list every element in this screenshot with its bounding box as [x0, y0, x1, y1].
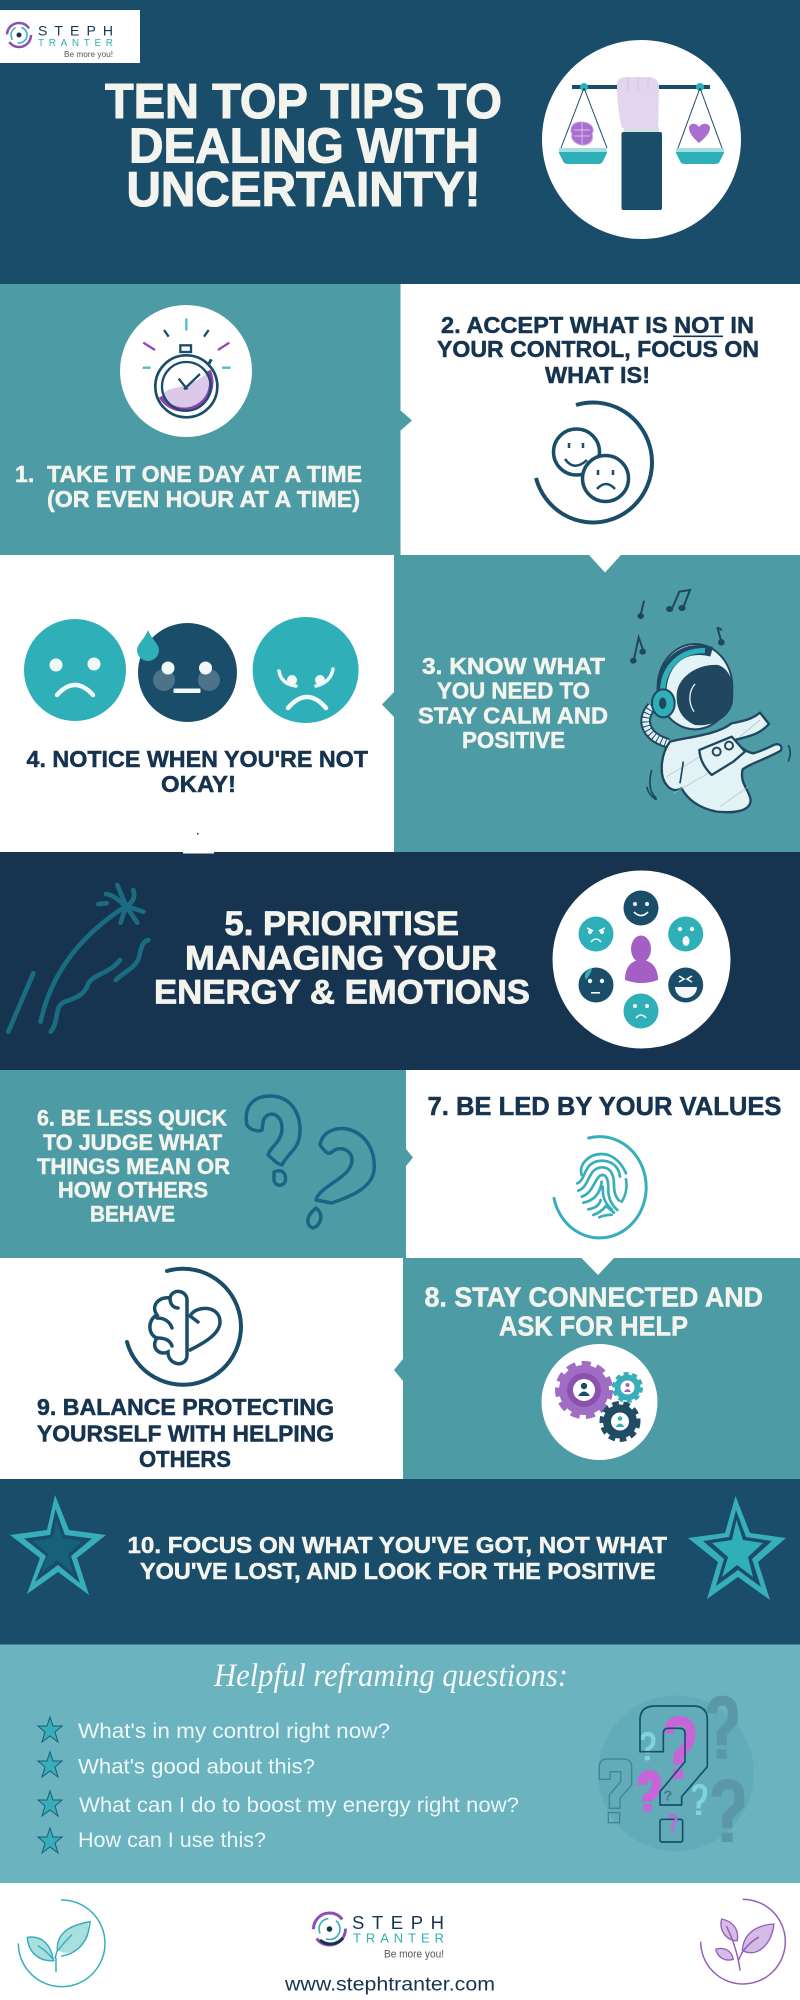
text: tip 10: YOU'VE LOST, AND LOOK FOR THE POSITIVE: [140, 1558, 656, 1584]
icon: question marks: [246, 1096, 374, 1228]
panel: tip 1: [0, 284, 400, 555]
logo: Steph Tranter: [0, 10, 140, 63]
text: tip 10: 10. FOCUS ON WHAT YOU'VE GOT, NOT WHAT: [128, 1532, 668, 1558]
question list: What's good about this?: [78, 1754, 315, 1778]
panel: tip 6: [0, 1070, 406, 1258]
text: tip 3: [418, 653, 608, 753]
text: tip 6: [37, 1106, 230, 1226]
icon: right star: [688, 1496, 786, 1600]
header panel: [0, 0, 800, 284]
text: tip 9: OTHERS: [139, 1446, 231, 1472]
icon: emotions around a person: [552, 870, 730, 1048]
website: www.stephtranter.com: [284, 1974, 495, 1996]
arrow: tip 8 to tip 9: [394, 1359, 403, 1381]
title: DEALING WITH: [129, 120, 479, 174]
text: tip 3: STAY CALM AND: [418, 702, 608, 728]
logo: Steph Tranter: Be more you!: [64, 49, 113, 59]
panel: helpful reframing questions: [0, 1644, 800, 1883]
text: tip 3: YOU NEED TO: [437, 678, 590, 704]
text: tip 9: [37, 1394, 334, 1472]
icon: scales held by hand: [542, 40, 741, 239]
icon: sad face: [24, 619, 126, 721]
text: tip 6: THINGS MEAN OR: [37, 1154, 230, 1179]
icon: nervous face: [137, 623, 237, 722]
text: tip 2: [437, 312, 759, 388]
text: tip 7: 7. BE LED BY YOUR VALUES: [428, 1091, 782, 1121]
panel: tip 5: [0, 851, 800, 1070]
text: tip 1: [15, 461, 362, 512]
icon: list stars: [38, 1717, 62, 1853]
text: tip 9: 9. BALANCE PROTECTING: [37, 1394, 334, 1420]
text: tip 1: 1. TAKE IT ONE DAY AT A TIME: [15, 461, 362, 487]
icon: brain and heart: [127, 1269, 241, 1385]
title: UNCERTAINTY!: [126, 163, 480, 217]
icon: question mark cluster: ?: [663, 1789, 672, 1805]
logo: Steph Tranter: [314, 1912, 444, 1960]
panel: tip 9: [0, 1258, 403, 1479]
logo: Steph Tranter: STEPH: [352, 1912, 444, 1933]
logo: Steph Tranter: STEPH: [38, 22, 113, 38]
text: tip 4: 4. NOTICE WHEN YOU'RE NOT: [26, 746, 368, 772]
logo: Steph Tranter: TRANTER: [353, 1930, 444, 1946]
question list: What's in my control right now?: [78, 1719, 390, 1743]
icon: purple plant: [701, 1899, 785, 1984]
title: TEN TOP TIPS TO: [105, 75, 502, 129]
heading: Helpful reframing questions:: [213, 1658, 568, 1694]
question list: What can I do to boost my energy right now?: [79, 1793, 519, 1817]
text: tip 5: [154, 905, 530, 1012]
question list: How can I use this?: [78, 1828, 266, 1852]
footer: [0, 1883, 800, 2000]
text: tip 8: [424, 1282, 763, 1342]
icon: stopwatch: [120, 305, 252, 437]
icon: question mark cluster: [598, 1695, 754, 1851]
text: tip 8: 8. STAY CONNECTED AND: [424, 1282, 763, 1312]
icon: happy and sad faces: [536, 402, 652, 522]
text: tip 3: 3. KNOW WHAT: [422, 653, 605, 679]
text: tip 5: 5. PRIORITISE: [224, 905, 459, 943]
text: tip 6: BEHAVE: [90, 1202, 175, 1226]
text: tip 5: ENERGY & EMOTIONS: [154, 974, 530, 1012]
text: tip 6: 6. BE LESS QUICK: [37, 1106, 228, 1130]
text: tip 10: [128, 1532, 668, 1584]
logo: Steph Tranter: TRANTER: [38, 38, 113, 49]
icon: angry face: [253, 617, 359, 723]
arrow: tip 2 to tip 3: [589, 555, 621, 572]
panel: tip 2: [400, 284, 800, 555]
text: tip 9: YOURSELF WITH HELPING: [37, 1420, 334, 1446]
text: tip 4: [26, 746, 368, 797]
text: tip 1: (OR EVEN HOUR AT A TIME): [47, 486, 360, 512]
title: [105, 75, 502, 217]
logo: Steph Tranter: Be more you!: [384, 1948, 444, 1960]
text: tip 2: 2. ACCEPT WHAT IS NOT IN: [441, 312, 754, 338]
panel: tip 10: [0, 1479, 800, 1644]
icon: firework: [8, 885, 148, 1032]
panel: tip 8: [394, 1258, 800, 1479]
arrow: tip 1 to tip 2: [400, 410, 412, 431]
question list: [78, 1719, 519, 1852]
text: tip 3: POSITIVE: [462, 727, 565, 753]
icon: astronaut with headphones: [631, 590, 790, 812]
icon: fingerprint: [554, 1137, 646, 1238]
arrow: tip 6 to tip 7: [406, 1149, 413, 1166]
text: tip 6: TO JUDGE WHAT: [43, 1130, 222, 1155]
icon: teal plant: [18, 1900, 105, 1987]
text: tip 6: HOW OTHERS: [58, 1178, 208, 1202]
text: tip 5: MANAGING YOUR: [185, 940, 497, 978]
text: tip 4: OKAY!: [161, 771, 236, 797]
icon: connected gears: [542, 1344, 658, 1460]
arrow: tip 7 to tip 8: [582, 1258, 614, 1275]
arrow: tip 3 to tip 4: [382, 692, 394, 717]
panel: tip 3: [382, 555, 800, 852]
panel: tip 4: [0, 555, 394, 852]
text: tip 8: ASK FOR HELP: [499, 1310, 688, 1342]
panel: tip 7: [406, 1070, 800, 1258]
text: tip 2: YOUR CONTROL, FOCUS ON: [437, 336, 759, 362]
text: tip 2: WHAT IS!: [545, 362, 650, 388]
icon: left star: [10, 1495, 106, 1595]
